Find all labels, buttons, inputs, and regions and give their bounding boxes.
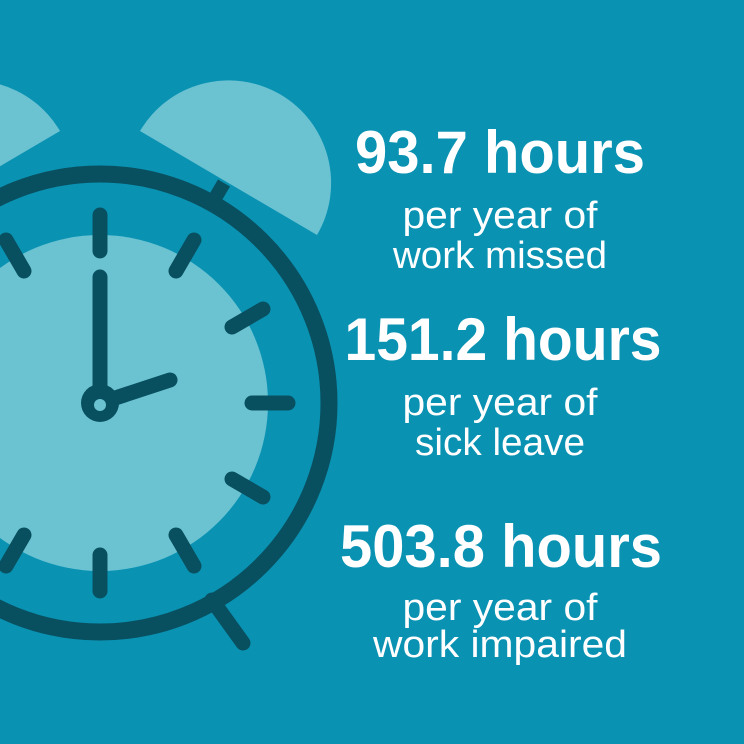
stat: 151.2 hours sick leave: per year of <box>402 382 598 424</box>
stat: 503.8 hours work impaired <box>340 513 662 666</box>
stat: 93.7 hours work missed: 93.7 hours <box>355 119 645 186</box>
alarm clock <box>0 80 331 643</box>
stat: 151.2 hours sick leave <box>344 306 662 464</box>
stat: 151.2 hours sick leave: sick leave <box>415 422 585 464</box>
icon: pivot <box>81 384 119 422</box>
stat: 93.7 hours work missed: per year of <box>402 195 598 237</box>
icon: right bell <box>140 80 331 235</box>
stat: 503.8 hours work impaired: 503.8 hours <box>340 513 662 580</box>
stat: 503.8 hours work impaired: work impaired <box>372 624 627 666</box>
stat: 93.7 hours work missed: work missed <box>392 235 607 277</box>
stat: 503.8 hours work impaired: per year of <box>402 587 598 629</box>
icon: hour ticks <box>0 215 288 591</box>
icon: left bell <box>0 80 60 235</box>
icon: clock hands <box>100 277 170 403</box>
icon: bell stem <box>214 183 224 200</box>
stat: 151.2 hours sick leave: 151.2 hours <box>344 306 662 373</box>
icon: clock face <box>0 235 268 571</box>
icon: clock ring <box>0 174 329 632</box>
stat: 93.7 hours work missed <box>355 119 645 277</box>
icon: legs <box>0 600 243 643</box>
